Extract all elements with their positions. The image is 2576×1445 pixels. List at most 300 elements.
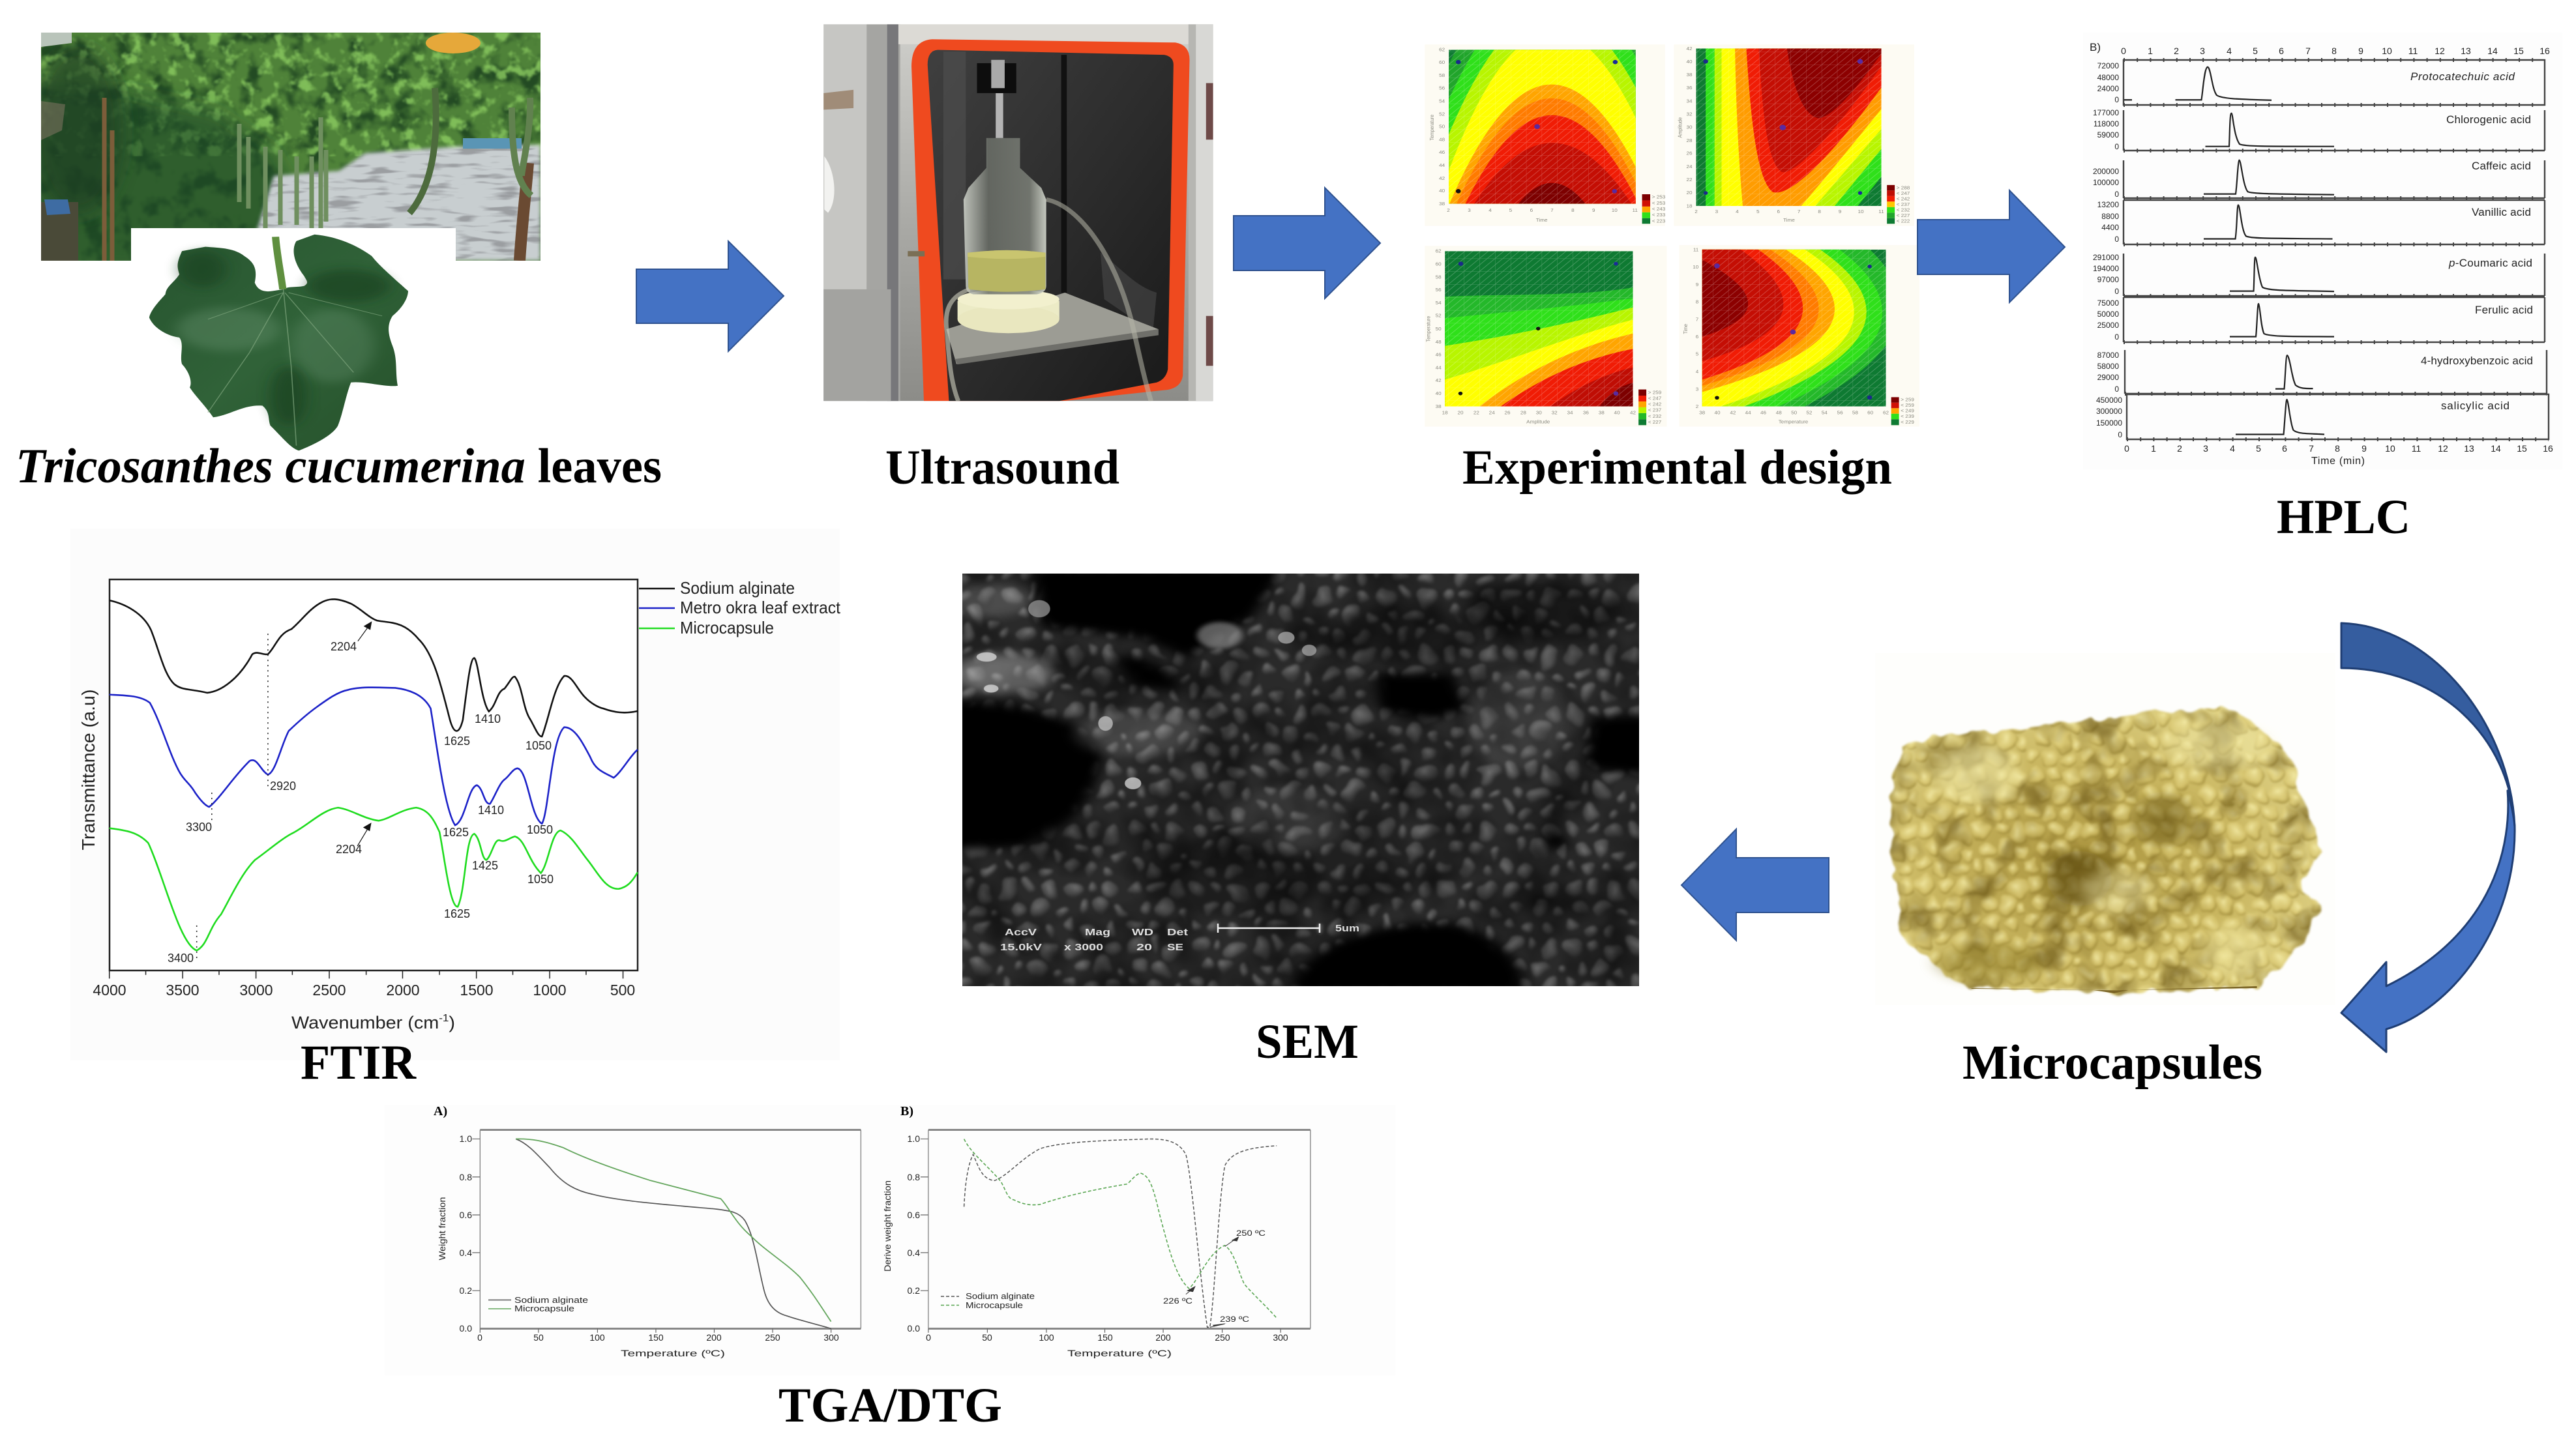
DTG axis labels: 250 ºC (1236, 1229, 1266, 1238)
TGA axis labels: Temperature (ºC) (621, 1348, 725, 1358)
contour plot: time vs temperature: 11 (1633, 207, 1638, 213)
time axes: 9 (2361, 443, 2367, 454)
instrument readout: AccV (1005, 927, 1037, 938)
contour plot: time vs temperature: Temperature (1429, 115, 1435, 140)
DTG axis labels: 200 (1155, 1332, 1171, 1343)
contour plot: temperature vs time: < 259 (1901, 402, 1914, 408)
time axes: 1 (2151, 443, 2156, 454)
y-axis intensity values: 75000 (2097, 299, 2119, 308)
time axes: 11 (2408, 46, 2418, 56)
y-axis intensity values: 0 (2114, 190, 2119, 199)
contour plot: time vs temperature: 38 (1439, 201, 1445, 207)
contour plot: time vs temperature: 4 (1488, 207, 1492, 213)
contour plot: amplitude vs temperature: 28 (1520, 410, 1526, 415)
contour plot: time vs amplitude: 5 (1756, 209, 1760, 214)
time axes: 3 (2203, 443, 2208, 454)
compound labels: Ferulic acid (2475, 304, 2533, 316)
legend: Microcapsule (680, 618, 774, 637)
time axis title: Time (min) (2311, 456, 2365, 467)
contour plot: temperature vs time: > 259 (1901, 397, 1914, 402)
contour plot: amplitude vs temperature: 42 (1436, 378, 1442, 383)
spectral curves (110, 599, 638, 978)
time axes: 7 (2309, 443, 2314, 454)
y-axis intensity values: 8800 (2101, 212, 2119, 221)
white backing behind leaf (131, 228, 456, 451)
contour plot: amplitude vs temperature: 24 (1489, 410, 1496, 415)
TGA and DTG axes and curves (472, 1130, 1310, 1333)
compound labels: salicylic acid (2441, 400, 2509, 412)
y-axis intensity values: 29000 (2097, 373, 2119, 382)
time axes: 13 (2461, 46, 2471, 56)
y-axis intensity values: 0 (2118, 430, 2122, 439)
contour plot: temperature vs time: 52 (1806, 410, 1812, 415)
DTG axis labels: 0 (926, 1332, 931, 1343)
contour plot: time vs temperature: 8 (1571, 207, 1575, 213)
contour plot: time vs temperature: < 243 (1652, 207, 1665, 212)
DTG axis labels (882, 1133, 1288, 1358)
contour plot: time vs temperature: 54 (1439, 98, 1445, 104)
TGA axis labels (437, 1133, 839, 1358)
DTG axis labels: 0.4 (908, 1248, 920, 1258)
peak labels (168, 640, 554, 965)
contour plot: time vs amplitude: 4 (1736, 209, 1739, 214)
y-axis intensity values: 100000 (2093, 178, 2119, 187)
peak labels: 1625 (444, 907, 470, 920)
arrow: ultrasound to experimental design (1234, 188, 1380, 299)
TGA axis labels: 150 (648, 1332, 664, 1343)
arrow: curved HPLC to microcapsules (2341, 623, 2515, 1052)
heading: microcapsules: Microcapsules (1962, 1036, 2262, 1090)
heading: ultrasound: Ultrasound (885, 441, 1119, 495)
wavenumber tick labels: 1500 (460, 982, 494, 999)
contour plot: amplitude vs temperature: < 237 (1648, 407, 1661, 413)
contour plot: temperature vs time: 7 (1696, 317, 1698, 322)
DTG axis labels: 0.0 (908, 1323, 920, 1334)
panel: experimental design contour plots (1425, 44, 1919, 426)
y-axis intensity values: 25000 (2097, 321, 2119, 330)
y-axis intensity values: 0 (2114, 287, 2119, 296)
TGA axis labels: 200 (706, 1332, 722, 1343)
y-axis intensity values: 200000 (2093, 167, 2119, 176)
time axes: 0 (2124, 443, 2129, 454)
chart frames and ticks (2124, 60, 2549, 439)
contour plot: time vs amplitude: Time (1783, 218, 1795, 223)
time axes: 16 (2543, 443, 2553, 454)
contour plot: temperature vs time: 8 (1696, 299, 1698, 304)
y-axis intensity values: 0 (2114, 332, 2119, 342)
TGA axis labels: 0.4 (460, 1248, 472, 1258)
contour plot: time vs amplitude: 24 (1686, 164, 1693, 169)
TGA axis labels: 50 (533, 1332, 544, 1343)
TGA axis labels: 0.0 (460, 1323, 472, 1334)
contour plot: amplitude vs temperature: 58 (1436, 274, 1442, 280)
contour plot: amplitude vs temperature: 22 (1473, 410, 1479, 415)
time axes: 10 (2382, 46, 2392, 56)
contour plot: time vs amplitude: 2 (1695, 209, 1698, 214)
contour plot: time vs amplitude: 6 (1777, 209, 1780, 214)
contour plot: time vs temperature: < 223 (1652, 218, 1665, 224)
compound labels: p-Coumaric acid (2448, 257, 2532, 269)
peak labels: 2920 (270, 780, 296, 793)
contour plot: time vs temperature: 50 (1439, 124, 1445, 129)
contour plot: amplitude vs temperature: < 242 (1648, 401, 1661, 407)
contour plot: time vs temperature: 52 (1439, 111, 1445, 117)
time axes (2121, 46, 2553, 454)
compound labels: Caffeic acid (2472, 160, 2531, 172)
peak labels: 1050 (527, 873, 554, 886)
peak labels: 1050 (526, 739, 552, 752)
time axes: 15 (2517, 443, 2527, 454)
contour plot: time vs amplitude: < 237 (1897, 201, 1910, 207)
chart: FTIR spectra (70, 529, 841, 1060)
contour plot: amplitude vs temperature: 18 (1442, 410, 1448, 415)
time axes: 1 (2148, 46, 2153, 56)
scale bar (1218, 924, 1320, 933)
DTG axis labels: 50 (982, 1332, 992, 1343)
wavenumber tick labels (93, 982, 635, 999)
contour plot: amplitude vs temperature: > 259 (1648, 390, 1661, 395)
instrument readout: 15.0kV (1000, 942, 1042, 953)
contour plot: time vs amplitude: 30 (1686, 124, 1693, 130)
heading: plant source: Tricosanthes cucumerina leaves (16, 439, 662, 493)
TGA axis labels: 100 (589, 1332, 605, 1343)
panel letter B: B) (900, 1104, 913, 1118)
contour plot: time vs temperature: 58 (1439, 72, 1445, 78)
axis titles: ) (449, 1013, 455, 1032)
contour plot: temperature vs time: 6 (1696, 334, 1698, 340)
time axes: 4 (2227, 46, 2232, 56)
y-axis intensity values: 87000 (2097, 351, 2119, 360)
DTG axis labels: 0.8 (908, 1172, 920, 1182)
peak labels: 2204 (331, 640, 357, 653)
y-axis intensity values: 0 (2114, 142, 2119, 151)
y-axis intensity values: 0 (2114, 235, 2119, 244)
heading: SEM: SEM (1256, 1015, 1359, 1069)
contour plot: time vs temperature: 6 (1530, 207, 1533, 213)
contour plot: amplitude vs temperature: 30 (1536, 410, 1542, 415)
contour plot: amplitude vs temperature: < 247 (1648, 396, 1661, 401)
instrument readout: SE (1167, 942, 1183, 953)
TGA axis labels: 0.2 (460, 1285, 472, 1296)
contour plot: time vs temperature: 60 (1439, 60, 1445, 65)
contour plot: time vs amplitude: 40 (1686, 59, 1693, 65)
contour plot: temperature vs time: Time (1682, 324, 1689, 334)
arrow: leaves to ultrasound (636, 241, 784, 351)
compound labels (2410, 70, 2533, 412)
heading: FTIR: FTIR (301, 1036, 417, 1090)
y-axis intensity values: 118000 (2094, 119, 2119, 128)
contour plot: time vs amplitude: 18 (1686, 203, 1693, 209)
contour plot: temperature vs time: 46 (1760, 410, 1766, 415)
transmittance axis title: Transmittance (a.u) (78, 689, 98, 851)
contour plot: time vs amplitude: < 242 (1897, 196, 1910, 201)
peak labels: 1050 (527, 823, 553, 836)
DTG axis labels: Sodium alginate (966, 1291, 1035, 1301)
contour plot: amplitude vs temperature: 54 (1436, 300, 1442, 306)
peak labels: 1425 (472, 859, 498, 872)
contour plot: amplitude vs temperature: < 232 (1648, 413, 1661, 419)
contour plot: temperature vs time: 54 (1822, 410, 1828, 415)
contour plot: temperature vs time: 56 (1837, 410, 1843, 415)
TGA axis labels: 0.6 (460, 1210, 472, 1220)
time axes: 9 (2358, 46, 2363, 56)
legend: Sodium alginate (680, 578, 795, 598)
legend: Metro okra leaf extract (680, 598, 841, 617)
peak labels: 2204 (336, 843, 362, 856)
DTG axis labels: 0.2 (908, 1285, 920, 1296)
panel letter B: B) (2090, 41, 2101, 53)
contour plot: amplitude vs temperature: 32 (1552, 410, 1558, 415)
contour plot: time vs amplitude: 34 (1686, 98, 1693, 104)
TGA axis labels: 1.0 (460, 1133, 472, 1144)
time axes: 14 (2491, 443, 2501, 454)
wavenumber tick labels: 2000 (386, 982, 420, 999)
time axes: 8 (2332, 46, 2337, 56)
contour plot: time vs amplitude: < 247 (1897, 190, 1910, 196)
compound labels: Protocatechuic acid (2410, 70, 2515, 83)
contour plot: time vs amplitude: < 227 (1897, 212, 1910, 218)
photo: ultrasound chamber (823, 24, 1213, 401)
time axes: 15 (2513, 46, 2524, 56)
contour plot: amplitude vs temperature: 48 (1436, 339, 1442, 345)
TGA axis labels: Sodium alginate (514, 1295, 588, 1305)
y-axis intensity values: 48000 (2097, 73, 2119, 82)
y-axis intensity values: 59000 (2097, 130, 2119, 139)
photo: microcapsules (1887, 704, 2324, 998)
DTG axis labels: 150 (1097, 1332, 1113, 1343)
contour plot: amplitude vs temperature (1425, 248, 1661, 425)
DTG axis labels: Temperature (ºC) (1067, 1348, 1172, 1358)
contour plot: time vs amplitude: < 222 (1897, 218, 1910, 224)
contour plot: time vs temperature: 42 (1439, 175, 1445, 181)
time axes: 5 (2253, 46, 2258, 56)
heading: HPLC: HPLC (2277, 490, 2410, 544)
y-axis intensity values: 300000 (2096, 407, 2122, 416)
y-axis intensity values: 450000 (2096, 396, 2122, 405)
time axes: 5 (2256, 443, 2261, 454)
contour plot: time vs temperature: 5 (1509, 207, 1512, 213)
contour plot: temperature vs time: < 239 (1901, 413, 1914, 419)
contour plot: amplitude vs temperature: 40 (1614, 410, 1620, 415)
y-axis intensity values: 150000 (2096, 418, 2122, 428)
time axes: 7 (2305, 46, 2311, 56)
contour plot: amplitude vs temperature: < 227 (1648, 419, 1661, 425)
time axes: 14 (2487, 46, 2498, 56)
contour plot: time vs temperature: Time (1536, 218, 1548, 223)
contour plot: amplitude vs temperature: 26 (1505, 410, 1511, 415)
wavenumber tick labels: 2500 (312, 982, 346, 999)
contour plot: time vs amplitude: 10 (1858, 209, 1864, 214)
contour plot: amplitude vs temperature: 20 (1457, 410, 1463, 415)
contour plot: time vs amplitude: 38 (1686, 72, 1693, 78)
icon: single leaf (149, 235, 408, 450)
contour plot: time vs amplitude: 8 (1818, 209, 1821, 214)
TGA axis labels: 250 (765, 1332, 780, 1343)
contour plot: temperature vs time: 48 (1776, 410, 1782, 415)
wavenumber tick labels: 500 (610, 982, 635, 999)
DTG axis labels: 300 (1273, 1332, 1288, 1343)
time axes: 2 (2174, 46, 2179, 56)
instrument readout (1001, 929, 1188, 950)
peak labels: 1625 (444, 735, 470, 748)
instrument readout: x 3000 (1064, 942, 1103, 953)
contour plot: temperature vs time: 3 (1696, 387, 1698, 392)
time axes: 4 (2230, 443, 2235, 454)
image: SEM micrograph (962, 574, 1639, 986)
instrument readout: Mag (1085, 927, 1110, 938)
time axes: 12 (2435, 46, 2445, 56)
contour plot: amplitude vs temperature: Temperature (1425, 316, 1431, 342)
panel letter A: A) (434, 1104, 447, 1118)
contour plot: time vs temperature: 56 (1439, 85, 1445, 91)
y-axis intensity values (2093, 61, 2122, 439)
DTG axis labels: 1.0 (908, 1133, 920, 1144)
contour plot: time vs temperature: 10 (1612, 207, 1618, 213)
contour plot: amplitude vs temperature: 50 (1436, 326, 1442, 332)
peak labels: 3300 (186, 821, 212, 834)
contour plot: temperature vs time: 40 (1714, 410, 1721, 415)
DTG axis labels: 250 (1215, 1332, 1230, 1343)
TGA and DTG legend keys (488, 1296, 959, 1309)
time axes: 6 (2279, 46, 2284, 56)
y-axis intensity values: 291000 (2093, 253, 2119, 262)
time axes: 11 (2412, 443, 2421, 454)
contour plot: time vs amplitude: 28 (1686, 138, 1693, 143)
axis titles: -1 (439, 1013, 449, 1024)
contour plot: temperature vs time: 44 (1745, 410, 1751, 415)
contour plot: time vs amplitude: 9 (1839, 209, 1841, 214)
contour plot: amplitude vs temperature: 44 (1436, 365, 1442, 370)
photo: Tricosanthes cucumerina vines (26, 33, 540, 274)
compound labels: Vanillic acid (2472, 206, 2531, 218)
y-axis intensity values: 24000 (2097, 84, 2119, 93)
contour plot: temperature vs time: 58 (1852, 410, 1858, 415)
y-axis intensity values: 4400 (2101, 223, 2119, 232)
y-axis intensity values: 97000 (2097, 275, 2119, 284)
contour plot: time vs temperature: 2 (1447, 207, 1450, 213)
TGA axis labels: 0 (477, 1332, 482, 1343)
DTG axis labels: 239 ºC (1220, 1315, 1249, 1324)
contour plot: amplitude vs temperature: 62 (1436, 248, 1442, 254)
peak labels: 3400 (168, 952, 194, 965)
contour plot: amplitude vs temperature: 40 (1436, 391, 1442, 396)
contour plot: time vs amplitude: Amplitude (1677, 117, 1683, 138)
contour plot: temperature vs time: 11 (1693, 247, 1698, 252)
chart: TGA and DTG (385, 1104, 1395, 1375)
contour plot: temperature vs time: < 249 (1901, 408, 1914, 413)
contour plot: temperature vs time (1683, 248, 1914, 425)
contour plot: time vs amplitude: > 288 (1897, 185, 1910, 190)
time axes: 6 (2282, 443, 2287, 454)
contour plot: time vs amplitude: 3 (1715, 209, 1718, 214)
heading: experimental design: Experimental design (1462, 441, 1892, 495)
contour plot: temperature vs time: 60 (1867, 410, 1873, 415)
contour plot: time vs temperature: 46 (1439, 150, 1445, 155)
contour plot: amplitude vs temperature: 46 (1436, 352, 1442, 357)
contour plot: time vs temperature: > 253 (1652, 194, 1665, 199)
contour plot: temperature vs time: 4 (1696, 369, 1699, 374)
contour plot: time vs amplitude: 42 (1686, 46, 1693, 51)
contour plot: time vs amplitude: 32 (1686, 111, 1693, 117)
TGA axis labels: 0.8 (460, 1172, 472, 1182)
contour plot: amplitude vs temperature: 38 (1599, 410, 1605, 415)
time axes: 12 (2438, 443, 2448, 454)
time axes: 16 (2539, 46, 2550, 56)
contour plot: time vs temperature: < 233 (1652, 212, 1665, 218)
scale bar label: 5um (1335, 923, 1359, 934)
wavenumber tick labels: 3500 (166, 982, 200, 999)
contour plot: time vs amplitude: < 232 (1897, 207, 1910, 212)
heading: TGA/DTG: TGA/DTG (778, 1379, 1002, 1433)
TGA axis labels: Weight fraction (437, 1197, 447, 1261)
wavenumber tick labels: 3000 (239, 982, 273, 999)
instrument readout: Det (1167, 927, 1188, 938)
compound labels: Chlorogenic acid (2446, 113, 2531, 126)
time axes: 2 (2177, 443, 2182, 454)
y-axis intensity values: 177000 (2093, 108, 2119, 117)
contour plot: time vs amplitude: 7 (1798, 209, 1800, 214)
contour plot: amplitude vs temperature: 36 (1583, 410, 1589, 415)
contour plot: time vs temperature: 40 (1439, 188, 1445, 194)
chromatogram traces (2124, 67, 2334, 435)
contour plot: time vs temperature: 48 (1439, 137, 1445, 142)
contour plot: temperature vs time: 38 (1699, 410, 1705, 415)
contour plot: temperature vs time: 62 (1883, 410, 1889, 415)
wavenumber tick labels: 1000 (533, 982, 567, 999)
peak labels: 1410 (478, 804, 504, 817)
DTG axis labels: Derive weight fraction (882, 1180, 893, 1272)
DTG axis labels: 100 (1039, 1332, 1054, 1343)
time axes: 8 (2335, 443, 2340, 454)
peak labels: 1410 (475, 712, 501, 725)
contour plot: amplitude vs temperature: 42 (1630, 410, 1636, 415)
legend (639, 578, 841, 637)
arrow: microcapsules to SEM (1681, 829, 1829, 941)
contour plot: time vs temperature (1430, 48, 1665, 224)
time axes: 0 (2121, 46, 2126, 56)
DTG axis labels: 226 ºC (1163, 1296, 1192, 1306)
arrow: experimental design to HPLC (1917, 190, 2065, 302)
contour plot: time vs temperature: 9 (1592, 207, 1595, 213)
y-axis intensity values: 58000 (2097, 362, 2119, 371)
wavenumber tick labels: 4000 (93, 982, 126, 999)
contour plot: time vs amplitude: 36 (1686, 85, 1693, 91)
contour plot: amplitude vs temperature: 52 (1436, 313, 1442, 319)
contour plot: temperature vs time: 50 (1791, 410, 1797, 415)
contour plot: temperature vs time: 10 (1693, 265, 1698, 270)
y-axis intensity values: 0 (2114, 95, 2119, 104)
y-axis intensity values: 194000 (2093, 264, 2119, 273)
contour plot: time vs amplitude: 11 (1878, 209, 1884, 214)
contour plot: time vs temperature: 62 (1439, 47, 1445, 53)
contour plot: temperature vs time: < 229 (1901, 419, 1914, 425)
contour plot: temperature vs time: 2 (1696, 403, 1698, 409)
time axes: 3 (2200, 46, 2205, 56)
instrument readout: WD (1132, 927, 1153, 938)
contour plot: amplitude vs temperature: 34 (1567, 410, 1573, 415)
contour plot: temperature vs time: 42 (1730, 410, 1736, 415)
contour plot: amplitude vs temperature: 60 (1436, 261, 1442, 267)
contour plot: amplitude vs temperature: Amplitude (1526, 419, 1550, 424)
y-axis intensity values: 13200 (2097, 200, 2119, 209)
y-axis intensity values: 50000 (2097, 310, 2119, 319)
time axes: 13 (2464, 443, 2474, 454)
DTG axis labels: Microcapsule (966, 1300, 1023, 1310)
compound labels: 4-hydroxybenzoic acid (2421, 355, 2533, 367)
time axes: 10 (2385, 443, 2395, 454)
DTG axis labels: 0.6 (908, 1210, 920, 1220)
contour plot: temperature vs time: 5 (1696, 351, 1698, 357)
